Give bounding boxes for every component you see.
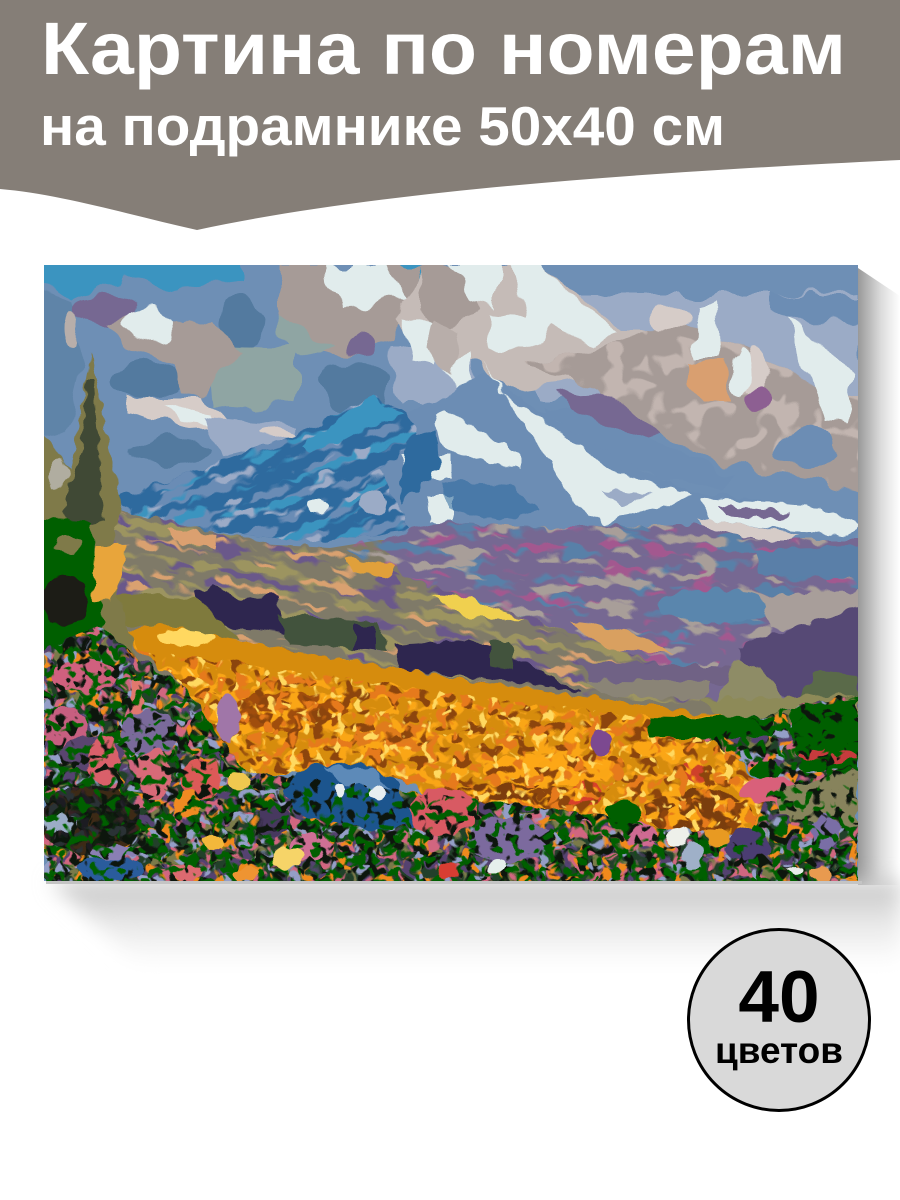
sky and clouds [44, 265, 858, 492]
canvas shadow [46, 268, 900, 965]
badge: 40 colours [688, 930, 870, 1110]
left pine tree [44, 352, 136, 684]
badge number: 40 [738, 957, 820, 1038]
badge label: цветов [715, 1030, 843, 1071]
header banner [0, 0, 900, 230]
title: Картина по номерам [41, 7, 846, 90]
orange flower field [128, 623, 765, 836]
painting: mountain and flower meadow [30, 255, 900, 890]
valley slopes [114, 510, 731, 704]
mid-ground underlayer [126, 540, 858, 718]
purple foothills [346, 520, 858, 708]
tree line [100, 585, 860, 718]
foreground flowers [30, 620, 870, 890]
subtitle: на подрамнике 50х40 см [40, 95, 725, 157]
snow-capped mountain [119, 360, 858, 543]
